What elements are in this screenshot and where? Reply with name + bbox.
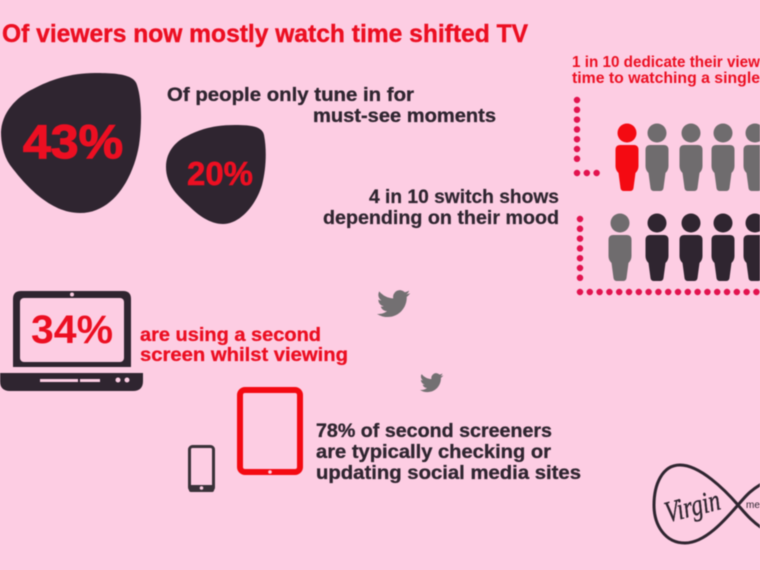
text: 78% of second screeners: updating social media sites (316, 462, 581, 484)
icon: twitter bird small (420, 373, 443, 392)
logo: Virgin Media (654, 465, 760, 543)
text: second screen (140, 324, 348, 366)
text: must-see moments: must-see moments (313, 105, 496, 127)
people row: 4 in 10 (608, 214, 760, 281)
text: must-see moments: Of people only tune in for (167, 84, 414, 106)
text: 78% of second screeners: 78% of second screeners (316, 420, 552, 442)
logo: Virgin Media: Virgin (661, 484, 724, 529)
blob stat: 20%: 20% (187, 155, 253, 192)
dotted connector: top (577, 100, 600, 173)
text: must-see moments (167, 84, 496, 127)
icon: phone (189, 446, 214, 492)
icon: laptop with 34% (0, 291, 143, 391)
title: Of viewers now mostly watch time shifted TV (2, 20, 528, 48)
dotted connector: bottom (580, 219, 760, 292)
text: 4 in 10 switch: depending on their mood (323, 207, 559, 229)
blob stat: 43%: 43% (23, 115, 123, 168)
text: second screen: are using a second (140, 324, 321, 346)
icon: tablet (240, 390, 300, 474)
text: second screen: screen whilst viewing (140, 344, 348, 366)
icon: laptop with 34%: 34% (31, 308, 113, 352)
people row: 1 in 10 (616, 124, 760, 191)
blob stat: 43% (1, 73, 141, 213)
blob stat: 20% (166, 125, 266, 224)
text: 1 in 10 dedicate (572, 54, 760, 87)
icon: twitter bird large (377, 290, 410, 317)
text: 1 in 10 dedicate: time to watching a single (572, 70, 760, 87)
text: 4 in 10 switch: 4 in 10 switch shows (369, 186, 559, 208)
text: 78% of second screeners (316, 420, 581, 484)
text: 4 in 10 switch (323, 186, 559, 229)
text: 78% of second screeners: are typically checking or (316, 441, 551, 463)
